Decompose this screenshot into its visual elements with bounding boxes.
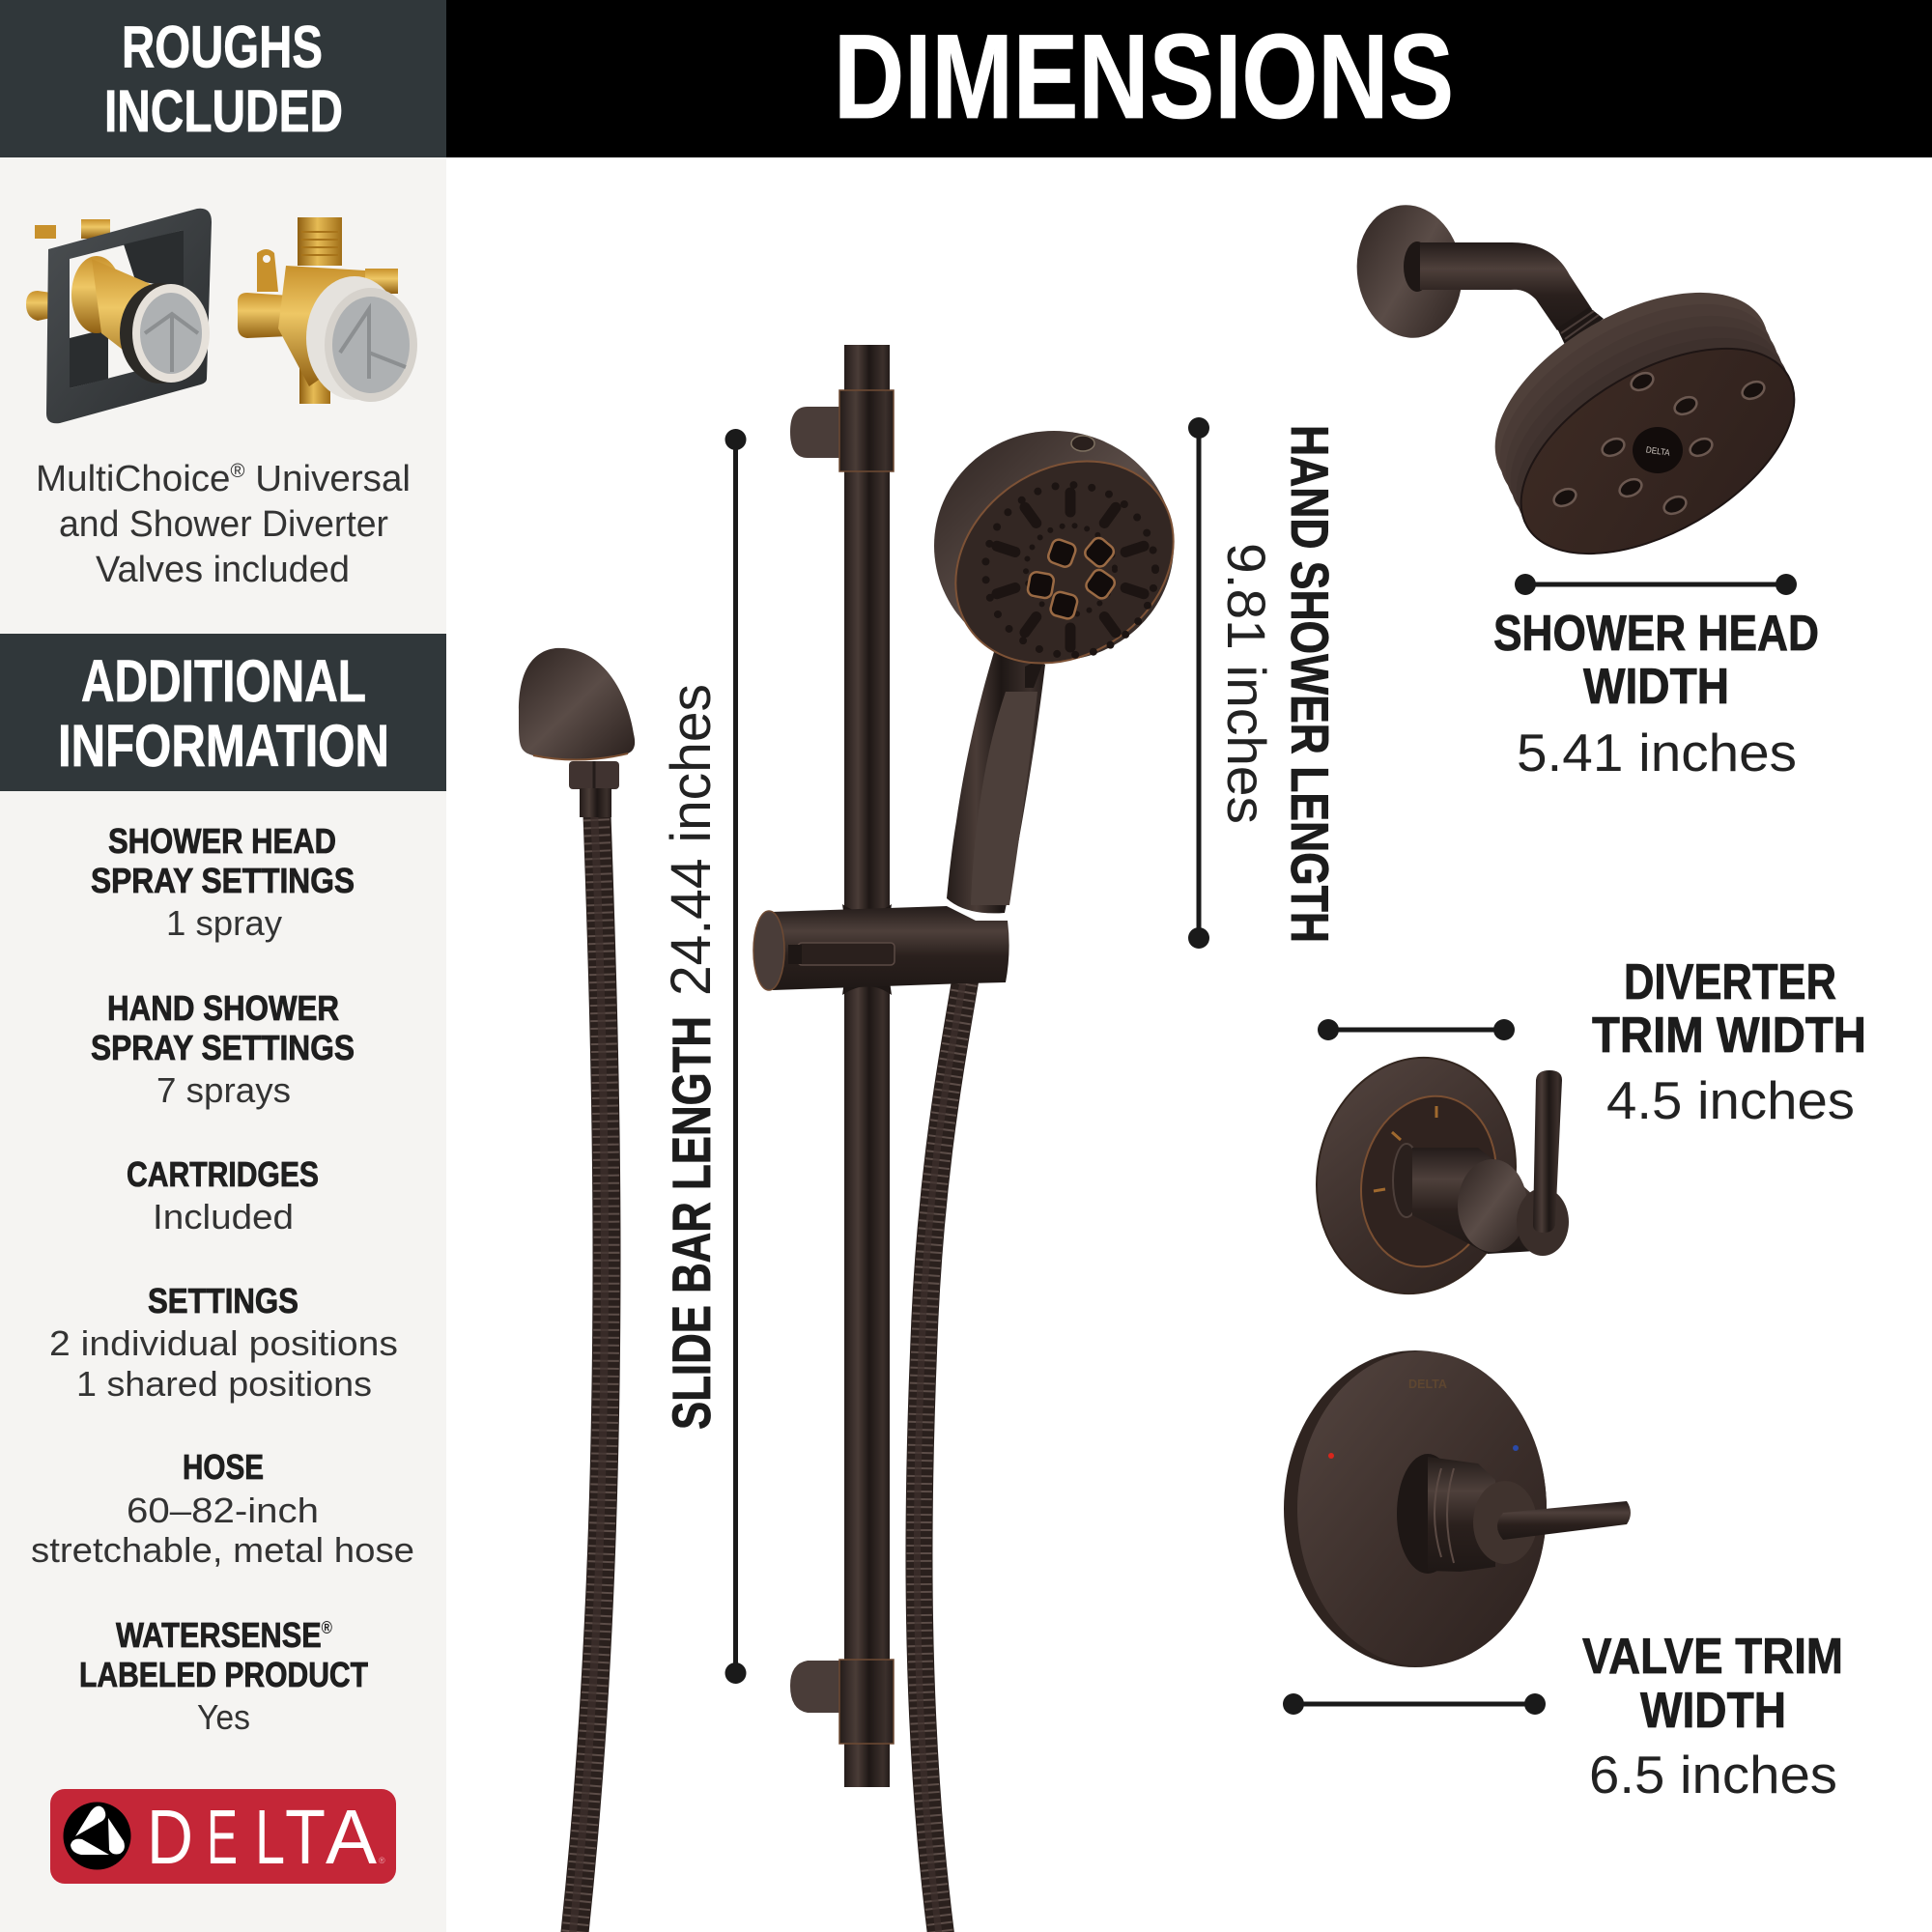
dimension: valve trim width: 6.5 inches — [1589, 1745, 1837, 1804]
dimension: hand shower length: 9.81 inches — [1216, 543, 1277, 824]
dimension: diverter trim width: DIVERTER — [1624, 954, 1836, 1010]
logo: delta: ® — [379, 1856, 385, 1865]
left sidebar panel — [0, 0, 446, 1932]
dimension: hand shower length: HAND SHOWER LENGTH — [1280, 425, 1340, 943]
header bar: dimensions — [446, 0, 1932, 157]
dimension: slide bar length: SLIDE BAR LENGTH — [661, 1016, 722, 1430]
info: hand shower spray settings: HAND SHOWER — [107, 988, 339, 1028]
logo: delta: L — [255, 1794, 285, 1880]
dimension: shower head width: WIDTH — [1583, 659, 1729, 715]
dimension: diverter trim width — [1318, 954, 1866, 1130]
info: watersense — [79, 1615, 368, 1737]
text: valves included: ® — [231, 461, 245, 482]
info: hose: stretchable, metal hose — [31, 1530, 414, 1570]
product: hose left — [572, 788, 607, 1932]
product: hand shower — [917, 420, 1212, 913]
info: watersense: WATERSENSE — [116, 1615, 356, 1655]
dimension: shower head width — [1493, 574, 1819, 782]
product: valve trim: DELTA — [1408, 1377, 1448, 1391]
icon: rough-in valve with black mounting frame — [26, 209, 212, 423]
dimension: shower head width: SHOWER HEAD — [1493, 606, 1819, 662]
header: additional information — [0, 634, 446, 791]
text: valves included — [36, 459, 411, 590]
info: settings: 1 shared positions — [76, 1364, 372, 1404]
product: valve trim — [1284, 1350, 1631, 1667]
info: settings — [49, 1281, 398, 1404]
product: slider clamp — [753, 904, 1009, 995]
text: valves included: MultiChoice — [36, 459, 228, 499]
info: cartridges — [127, 1154, 319, 1236]
info: shower head spray settings: SHOWER HEAD — [108, 821, 336, 861]
info: watersense: Yes — [197, 1697, 250, 1737]
info: cartridges: Included — [153, 1197, 294, 1236]
dimension: diverter trim width: 4.5 inches — [1606, 1070, 1855, 1130]
logo: delta: D — [147, 1794, 193, 1880]
header: additional information: INFORMATION — [58, 713, 389, 779]
dimension: hand shower length — [1188, 417, 1340, 949]
info: hose: 60–82-inch — [127, 1491, 319, 1530]
info: cartridges: CARTRIDGES — [127, 1154, 319, 1194]
product: wall outlet elbow — [519, 648, 635, 817]
info: settings: SETTINGS — [148, 1281, 298, 1321]
product: diverter trim — [1295, 1038, 1569, 1313]
info: shower head spray settings: 1 spray — [166, 903, 282, 943]
logo: delta — [50, 1789, 396, 1884]
info: hose — [31, 1447, 414, 1570]
logo: delta: A — [326, 1794, 378, 1880]
title: dimensions: DIMENSIONS — [834, 11, 1454, 144]
dimension: slide bar length: 24.44 inches — [660, 684, 723, 996]
header: roughs included: ROUGHS — [122, 14, 323, 79]
info: watersense: ® — [322, 1618, 332, 1637]
icon: diverter valve brass body — [238, 217, 417, 404]
nozzles on shower head face — [1551, 370, 1767, 517]
logo: delta: T — [285, 1794, 326, 1880]
logo: delta: E — [207, 1794, 238, 1880]
info: hand shower spray settings — [91, 988, 355, 1110]
dimension: valve trim width: WIDTH — [1640, 1683, 1786, 1739]
header: roughs included: INCLUDED — [104, 78, 343, 144]
dimension: diverter trim width: TRIM WIDTH — [1592, 1008, 1866, 1064]
info: hose: HOSE — [183, 1447, 264, 1487]
text: valves included: Universal — [244, 459, 411, 499]
dimension: valve trim width — [1283, 1629, 1843, 1804]
dimension: shower head width: 5.41 inches — [1517, 723, 1797, 782]
product: shower head with arm: DELTA — [1645, 444, 1670, 458]
info: hand shower spray settings: 7 sprays — [156, 1070, 291, 1110]
dimension: valve trim width: VALVE TRIM — [1582, 1629, 1843, 1685]
text: valves included: Valves included — [96, 550, 350, 590]
text: valves included: and Shower Diverter — [59, 504, 388, 545]
header: roughs included — [0, 0, 446, 157]
product: hose right — [917, 976, 966, 1932]
info: hand shower spray settings: SPRAY SETTINGS — [91, 1028, 355, 1067]
info: watersense: LABELED PRODUCT — [79, 1655, 368, 1694]
info: settings: 2 individual positions — [49, 1323, 398, 1363]
header: additional information: ADDITIONAL — [81, 648, 366, 714]
product: slide bar — [790, 345, 894, 1787]
dimension: slide bar length — [660, 429, 746, 1684]
info: shower head spray settings — [91, 821, 355, 943]
product: shower head with arm — [1349, 198, 1829, 596]
info: shower head spray settings: SPRAY SETTINGS — [91, 861, 355, 900]
